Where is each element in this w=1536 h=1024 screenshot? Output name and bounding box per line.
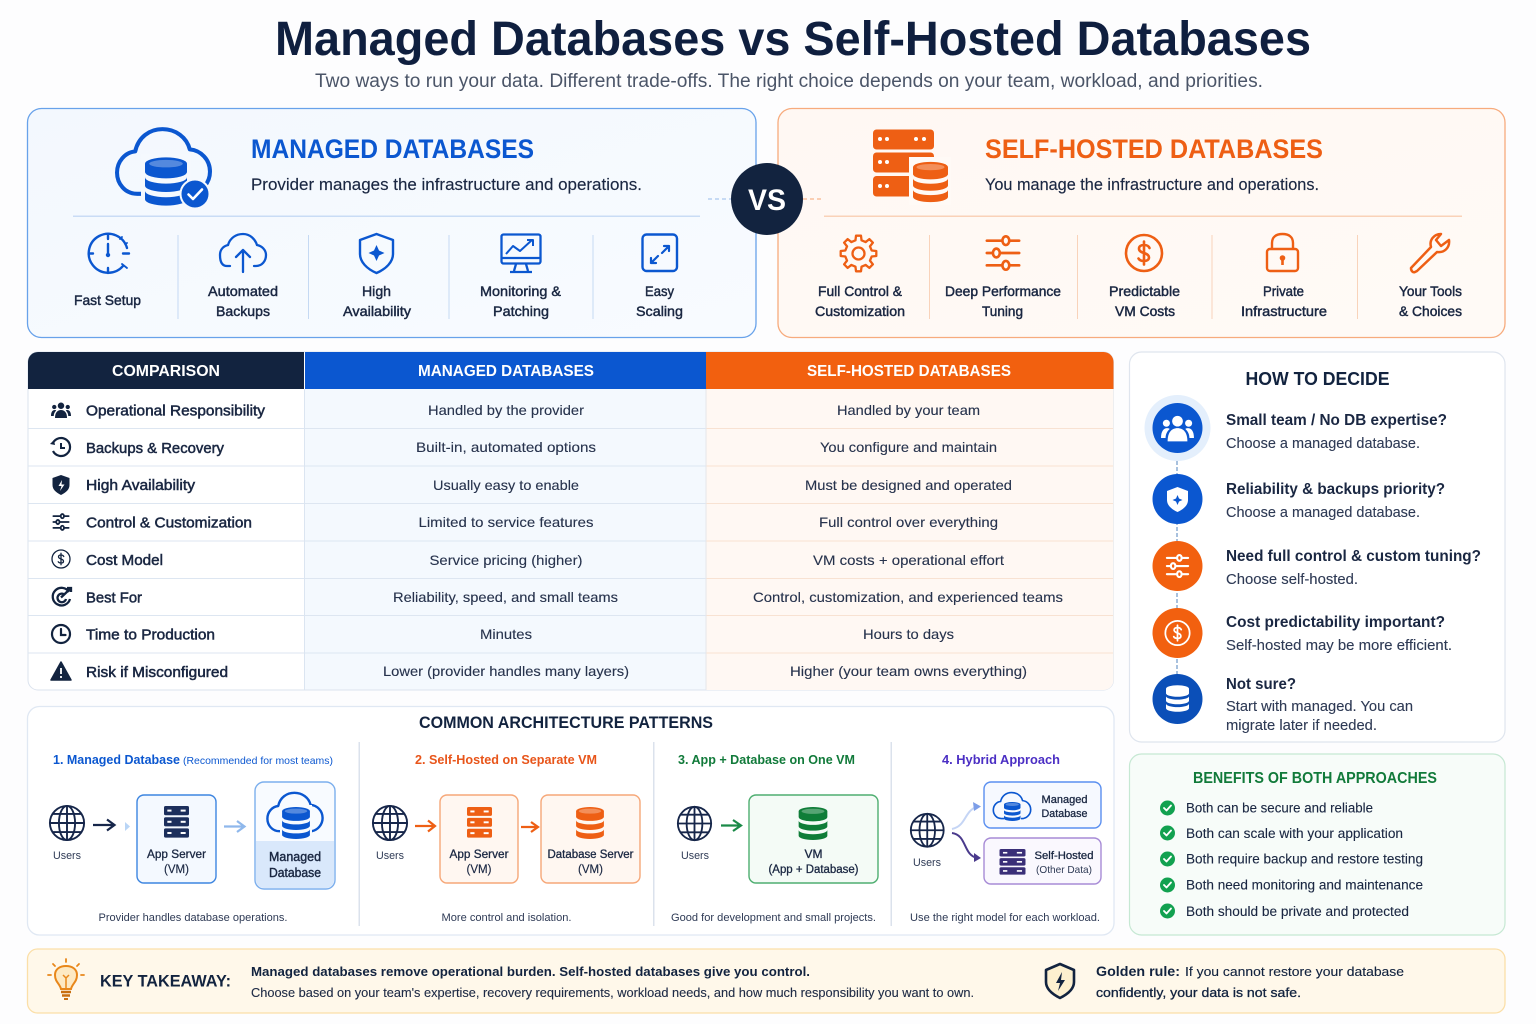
- description: Provider manages the infrastructure and operations.: [251, 175, 642, 194]
- row: time to production: [52, 625, 954, 644]
- feature: automated backups: Automated: [208, 283, 278, 299]
- golden rule text: [1096, 964, 1404, 1000]
- row: high availability: High Availability: [86, 478, 196, 494]
- icon: cloud database: [117, 129, 210, 208]
- row: high availability: [52, 475, 1012, 495]
- row: control and customization: [53, 514, 998, 532]
- feature: private infrastructure: [1241, 234, 1327, 319]
- feature: full control: Full Control &: [818, 283, 903, 299]
- feature: monitoring and patching: Monitoring &: [480, 283, 562, 299]
- decision: cost predictability: Self-hosted may be more efficient.: [1226, 637, 1452, 654]
- pattern 1: managed database: Users: [53, 850, 81, 862]
- benefit list: [1160, 800, 1423, 919]
- golden rule text: confidently, your data is not safe.: [1096, 985, 1301, 1000]
- row: cost model: Cost Model: [86, 553, 163, 569]
- row: risk if misconfigured: Higher (your team owns everything): [790, 663, 1027, 679]
- feature: monitoring and patching: [480, 234, 562, 319]
- feature: deep performance tuning: Deep Performance: [945, 283, 1061, 299]
- pattern 2: self-hosted on separate vm: Users: [376, 850, 404, 862]
- decision: reliability: Reliability & backups priority?: [1226, 481, 1445, 498]
- decision: not sure: Not sure?: [1226, 676, 1296, 693]
- decision: not sure: [1152, 674, 1413, 734]
- pattern 1: managed database: App Server: [147, 849, 206, 861]
- golden rule text: If you cannot restore your database: [1185, 964, 1404, 979]
- feature: high availability: High: [362, 283, 391, 299]
- row: risk if misconfigured: Risk if Misconfigured: [86, 665, 228, 681]
- row: control and customization: Full control over everything: [819, 514, 998, 530]
- decision: full control: Need full control & custom tuning?: [1226, 548, 1481, 565]
- decision: small team: Choose a managed database.: [1226, 435, 1420, 452]
- row: cost model: VM costs + operational effort: [813, 552, 1004, 568]
- label: key takeaway: KEY TAKEAWAY:: [100, 972, 231, 990]
- pattern 2: self-hosted on separate vm: 2. Self-Hosted on Separate VM: [415, 752, 597, 767]
- takeaway text: [251, 964, 974, 1000]
- row: high availability: Must be designed and operated: [805, 477, 1012, 493]
- decision: cost predictability: [1152, 608, 1452, 658]
- feature: predictable vm costs: Predictable: [1109, 283, 1180, 299]
- vs badge: [708, 163, 824, 235]
- feature: monitoring and patching: Patching: [493, 303, 549, 319]
- panel: common architecture patterns: [28, 706, 1114, 935]
- decision: reliability: Choose a managed database.: [1226, 504, 1420, 521]
- decision: full control: [1152, 541, 1481, 591]
- pattern 1: managed database: [50, 752, 335, 924]
- panel: managed databases: [28, 108, 756, 338]
- description: You manage the infrastructure and operations.: [985, 175, 1319, 194]
- feature: predictable vm costs: VM Costs: [1115, 303, 1175, 319]
- table header: comparison: COMPARISON: [112, 363, 220, 380]
- decision: reliability: [1152, 474, 1445, 524]
- pattern 2: self-hosted on separate vm: (VM): [578, 864, 603, 876]
- pattern 4: hybrid approach: [910, 752, 1101, 924]
- feature: predictable vm costs: [1109, 235, 1180, 319]
- row: cost model: [52, 550, 1004, 569]
- pattern 3: app and database on one vm: 3. App + Database on One VM: [678, 752, 855, 767]
- row: backups and recovery: You configure and maintain: [820, 439, 997, 455]
- benefit list: Both can be secure and reliable: [1186, 800, 1373, 816]
- pattern 1: managed database: 1. Managed Database: [53, 752, 180, 767]
- pattern 2: self-hosted on separate vm: (VM): [466, 864, 492, 876]
- feature: high availability: [343, 234, 411, 319]
- pattern 2: self-hosted on separate vm: Database Server: [548, 849, 634, 861]
- panel: benefits of both approaches: [1130, 754, 1505, 935]
- row: cost model: Service pricing (higher): [430, 552, 582, 568]
- takeaway text: Choose based on your team's expertise, recovery requirements, workload needs, and how much responsibility you want to own.: [251, 986, 974, 1000]
- key takeaway banner: [28, 949, 1505, 1013]
- pattern 2: self-hosted on separate vm: [373, 752, 640, 924]
- decision: small team: [1144, 395, 1447, 461]
- row: risk if misconfigured: [51, 662, 1027, 681]
- subtitle: Two ways to run your data. Different trade-offs. The right choice depends on your team, workload, and priorities.: [315, 71, 1263, 92]
- decision: not sure: Start with managed. You can: [1226, 698, 1413, 715]
- feature: easy scaling: [636, 234, 683, 319]
- row: operational responsibility: Operational Responsibility: [86, 404, 266, 420]
- decision: cost predictability: Cost predictability important?: [1226, 614, 1445, 631]
- vs badge: VS: [748, 184, 786, 217]
- row: operational responsibility: [51, 402, 980, 420]
- pattern 4: hybrid approach: Users: [913, 857, 941, 869]
- row: backups and recovery: [50, 438, 997, 457]
- feature: fast setup: Fast Setup: [74, 292, 141, 308]
- row: time to production: Time to Production: [86, 628, 215, 644]
- heading: self-hosted databases: SELF-HOSTED DATABASES: [985, 134, 1323, 164]
- pattern 4: hybrid approach: Use the right model for each workload.: [910, 912, 1100, 924]
- row: operational responsibility: Handled by your team: [837, 402, 980, 418]
- pattern 1: managed database: (Recommended for most teams): [183, 755, 333, 767]
- feature: your tools and choices: [1399, 234, 1462, 319]
- feature: full control: Customization: [815, 303, 905, 319]
- feature: automated backups: Backups: [216, 303, 270, 319]
- heading: how to decide: HOW TO DECIDE: [1246, 369, 1390, 389]
- benefit list: Both need monitoring and maintenance: [1186, 878, 1423, 892]
- benefit list: Both require backup and restore testing: [1186, 852, 1423, 866]
- pattern 4: hybrid approach: 4. Hybrid Approach: [942, 752, 1060, 767]
- row: risk if misconfigured: Lower (provider handles many layers): [383, 663, 629, 679]
- decision: small team: Small team / No DB expertise?: [1226, 412, 1447, 429]
- pattern 2: self-hosted on separate vm: App Server: [450, 849, 509, 861]
- feature: automated backups: [208, 234, 278, 319]
- title: Managed Databases vs Self-Hosted Databases: [275, 13, 1311, 66]
- pattern 3: app and database on one vm: VM: [804, 849, 822, 861]
- row: best for: Control, customization, and experienced teams: [753, 589, 1063, 605]
- row: control and customization: Limited to service features: [418, 514, 594, 530]
- row: best for: Best For: [86, 590, 142, 606]
- pattern 4: hybrid approach: Self-Hosted: [1034, 850, 1094, 862]
- row: time to production: Minutes: [480, 626, 532, 642]
- row: control and customization: Control & Customization: [86, 516, 252, 532]
- table header: managed databases: MANAGED DATABASES: [418, 363, 594, 380]
- benefit list: Both should be private and protected: [1186, 904, 1409, 919]
- icon: light bulb: [48, 959, 84, 999]
- pattern 1: managed database: Managed: [269, 850, 321, 864]
- row: operational responsibility: Handled by the provider: [428, 402, 584, 418]
- pattern 1: managed database: (VM): [164, 864, 189, 876]
- feature: easy scaling: Easy: [645, 283, 674, 299]
- panel: self-hosted databases: [778, 108, 1505, 338]
- comparison table: [28, 352, 1114, 690]
- pattern 1: managed database: Database: [269, 866, 321, 880]
- pattern 1: managed database: Provider handles database operations.: [98, 912, 288, 924]
- decision: full control: Choose self-hosted.: [1226, 571, 1358, 588]
- table header: self-hosted databases: SELF-HOSTED DATABASES: [807, 363, 1011, 380]
- pattern 4: hybrid approach: (Other Data): [1036, 864, 1092, 876]
- pattern 3: app and database on one vm: [671, 752, 878, 924]
- pattern 4: hybrid approach: Managed: [1042, 794, 1088, 806]
- feature: high availability: Availability: [343, 303, 411, 319]
- icon: server with database: [873, 130, 951, 205]
- feature: your tools and choices: Your Tools: [1399, 283, 1462, 299]
- panel: how to decide: [1130, 352, 1505, 742]
- pattern 4: hybrid approach: Database: [1042, 808, 1088, 820]
- row: best for: Reliability, speed, and small teams: [393, 589, 618, 605]
- decision: not sure: migrate later if needed.: [1226, 717, 1377, 734]
- feature: private infrastructure: Infrastructure: [1241, 303, 1327, 319]
- pattern 3: app and database on one vm: Good for development and small projects.: [671, 912, 876, 924]
- row: backups and recovery: Backups & Recovery: [86, 441, 225, 457]
- heading: architecture patterns: COMMON ARCHITECTURE PATTERNS: [419, 714, 713, 732]
- row: best for: [53, 588, 1063, 606]
- heading: managed databases: MANAGED DATABASES: [251, 134, 534, 164]
- feature: fast setup: [74, 234, 141, 308]
- pattern 3: app and database on one vm: Users: [681, 850, 709, 862]
- row: time to production: Hours to days: [863, 626, 954, 642]
- pattern 2: self-hosted on separate vm: More control and isolation.: [442, 912, 572, 924]
- feature: deep performance tuning: Tuning: [982, 303, 1023, 319]
- feature: full control: [815, 236, 905, 319]
- pattern 3: app and database on one vm: (App + Database): [768, 864, 859, 876]
- feature: your tools and choices: & Choices: [1399, 303, 1462, 319]
- feature: deep performance tuning: [945, 236, 1061, 319]
- row: high availability: Usually easy to enable: [433, 477, 579, 493]
- icon: golden rule shield: [1046, 964, 1074, 998]
- benefit list: Both can scale with your application: [1186, 826, 1403, 841]
- heading: benefits: BENEFITS OF BOTH APPROACHES: [1193, 770, 1437, 787]
- feature: private infrastructure: Private: [1263, 283, 1304, 299]
- golden rule text: Golden rule:: [1096, 964, 1180, 979]
- takeaway text: Managed databases remove operational burden. Self-hosted databases give you control.: [251, 964, 810, 979]
- row: backups and recovery: Built-in, automated options: [416, 439, 596, 455]
- feature: easy scaling: Scaling: [636, 303, 683, 319]
